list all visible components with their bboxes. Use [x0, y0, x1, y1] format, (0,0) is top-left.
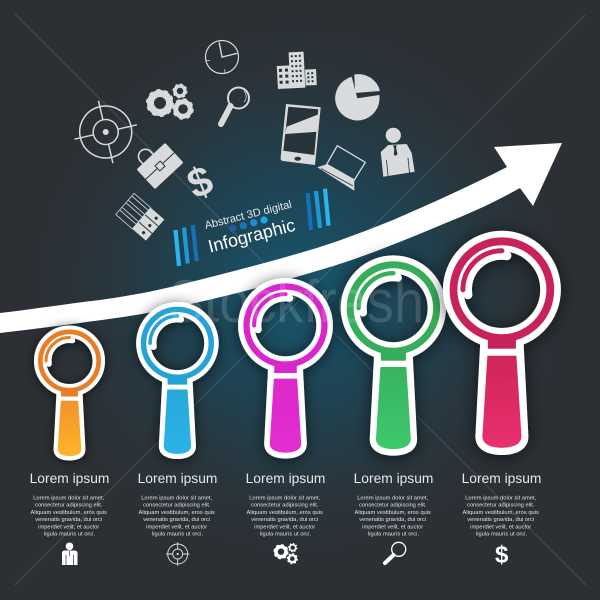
- magnifier 3: magenta: [246, 286, 325, 459]
- column 5 heading: Lorem ipsum: [462, 471, 541, 486]
- column 3 body: venenatis gravida, dui orci: [251, 517, 318, 523]
- main title: Infographic: [206, 215, 297, 257]
- column 5 body: Lorem ipsum dolor sit amet,: [465, 496, 537, 502]
- column 4 body: ligula mauris ut orci.: [368, 532, 419, 538]
- watermark: Stockfresh: [168, 268, 424, 335]
- bottom icon: dollar: $: [495, 542, 509, 568]
- left bars: [176, 225, 197, 266]
- growth arrow: [0, 143, 562, 333]
- column 3 body: imperdiet velit, et auctor: [254, 524, 315, 530]
- icon: pie chart: [335, 74, 380, 120]
- column 2 body: imperdiet velit, et auctor: [146, 524, 207, 530]
- icon: dollar: $: [181, 156, 219, 208]
- dots: [229, 216, 268, 232]
- icon: gears: [148, 84, 192, 118]
- column 3 body: consectetur adipiscing elit.: [251, 503, 319, 509]
- magnifier 4: green: [350, 265, 437, 456]
- column 3 heading: Lorem ipsum: [246, 471, 325, 486]
- right bars: [308, 189, 328, 230]
- column 2 body: Aliquam vestibulum, eros quis: [138, 510, 215, 516]
- column 4 body: imperdiet velit, et auctor: [362, 524, 423, 530]
- icon: laptop: [317, 146, 365, 191]
- column 2 body: Lorem ipsum dolor sit amet,: [141, 496, 213, 502]
- column 4 body: Aliquam vestibulum, eros quis: [354, 510, 431, 516]
- column 4 heading: Lorem ipsum: [354, 471, 433, 486]
- icon: tablet: [281, 104, 321, 165]
- column 5 body: Aliquam vestibulum, eros quis: [462, 510, 539, 516]
- icon: businessman: [381, 128, 415, 177]
- column 5 body: imperdiet velit, et auctor: [470, 524, 531, 530]
- column 4 body: consectetur adipiscing elit.: [359, 503, 427, 509]
- magnifier 1: orange: [40, 332, 99, 461]
- icon: magnifier: [221, 88, 249, 124]
- column 2 heading: Lorem ipsum: [138, 471, 217, 486]
- magnifier 2: blue: [143, 309, 211, 459]
- column 1 body: imperdiet velit, et auctor: [38, 524, 99, 530]
- magnifier 5: crimson: [453, 241, 551, 455]
- bottom icon: target: [166, 542, 189, 566]
- column 1 body: consectetur adipiscing elit.: [35, 503, 103, 509]
- column 1 body: Aliquam vestibulum, eros quis: [30, 510, 107, 516]
- column 5 text: [462, 471, 541, 538]
- title: Abstract 3D digital Infographic: [176, 189, 328, 266]
- subtitle: Abstract 3D digital: [204, 199, 293, 232]
- column 3 body: Aliquam vestibulum, eros quis: [246, 510, 323, 516]
- column 2 body: ligula mauris ut orci.: [152, 532, 203, 538]
- column 4 body: venenatis gravida, dui orci: [359, 517, 426, 523]
- column 4 body: Lorem ipsum dolor sit amet,: [357, 496, 429, 502]
- column 5 body: venenatis gravida, dui orci: [467, 517, 534, 523]
- column 4 text: [354, 471, 433, 538]
- column 3 body: Lorem ipsum dolor sit amet,: [249, 496, 321, 502]
- column 3 text: [246, 471, 325, 538]
- column 5 body: consectetur adipiscing elit.: [467, 503, 535, 509]
- icon: clock: [206, 40, 238, 74]
- column 2 body: consectetur adipiscing elit.: [143, 503, 211, 509]
- icon: briefcase: [129, 135, 183, 189]
- column 5 body: ligula mauris ut orci.: [476, 532, 527, 538]
- column 1 body: Lorem ipsum dolor sit amet,: [33, 496, 105, 502]
- column 1 body: venenatis gravida, dui orci: [35, 517, 102, 523]
- icon: target: [67, 94, 144, 170]
- bottom icon: magnifier: [385, 542, 406, 563]
- column 1 text: [30, 471, 109, 538]
- column 2 text: [138, 471, 217, 538]
- column 1 heading: Lorem ipsum: [30, 471, 109, 486]
- bottom icon: gears: [274, 544, 297, 564]
- icon cloud: [67, 40, 415, 241]
- bottom icon: businessman: [62, 542, 78, 565]
- icon: binders: [116, 193, 164, 241]
- column 1 body: ligula mauris ut orci.: [44, 532, 95, 538]
- column 3 body: ligula mauris ut orci.: [260, 532, 311, 538]
- icon: buildings: [276, 51, 317, 89]
- column 2 body: venenatis gravida, dui orci: [143, 517, 210, 523]
